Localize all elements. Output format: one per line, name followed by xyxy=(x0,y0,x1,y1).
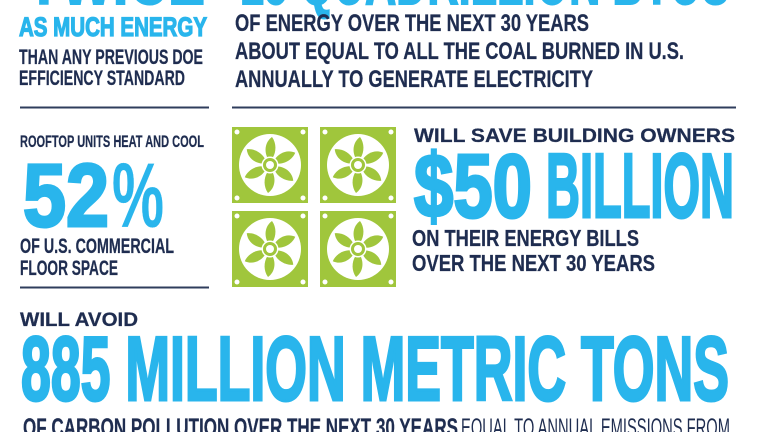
stat: 52: 52 xyxy=(23,145,109,245)
text: than any previous DOE: THAN ANY PREVIOUS DOE xyxy=(19,46,203,69)
panel: 50 billion savings xyxy=(412,126,735,276)
icon group: four rooftop fans xyxy=(232,127,396,287)
text: floor space: FLOOR SPACE xyxy=(20,257,118,280)
text: on their energy bills: ON THEIR ENERGY BILLS xyxy=(412,225,639,251)
heading: will save building owners: WILL SAVE BUILDING OWNERS xyxy=(414,126,735,147)
stat: percent sign: % xyxy=(112,145,164,247)
text: over the next 30 years: OVER THE NEXT 30 YEARS xyxy=(412,250,655,276)
panel: twice as much energy xyxy=(19,0,207,90)
text: of energy over the next 30 years: OF ENERGY OVER THE NEXT 30 YEARS xyxy=(235,10,589,37)
panel: quadrillion BTUs xyxy=(235,0,730,93)
text: efficiency standard: EFFICIENCY STANDARD xyxy=(19,67,185,90)
panel: 885 million metric tons xyxy=(20,310,730,432)
text: rooftop units heat and cool: ROOFTOP UNITS HEAT AND COOL xyxy=(20,132,204,151)
subheading: as much energy: AS MUCH ENERGY xyxy=(19,12,207,42)
text: annually to generate electricity: ANNUALLY TO GENERATE ELECTRICITY xyxy=(235,66,593,93)
icon: fan bottom right xyxy=(320,211,396,287)
stat: 50 dollars: $50 xyxy=(414,137,532,237)
icon: fan top left xyxy=(232,127,308,203)
text: of U.S. commercial: OF U.S. COMMERCIAL xyxy=(20,235,174,258)
panel: 52 percent floor space xyxy=(20,132,204,280)
heading: will avoid: WILL AVOID xyxy=(20,310,138,331)
icon: fan top right xyxy=(320,127,396,203)
icon: fan bottom left xyxy=(232,211,308,287)
